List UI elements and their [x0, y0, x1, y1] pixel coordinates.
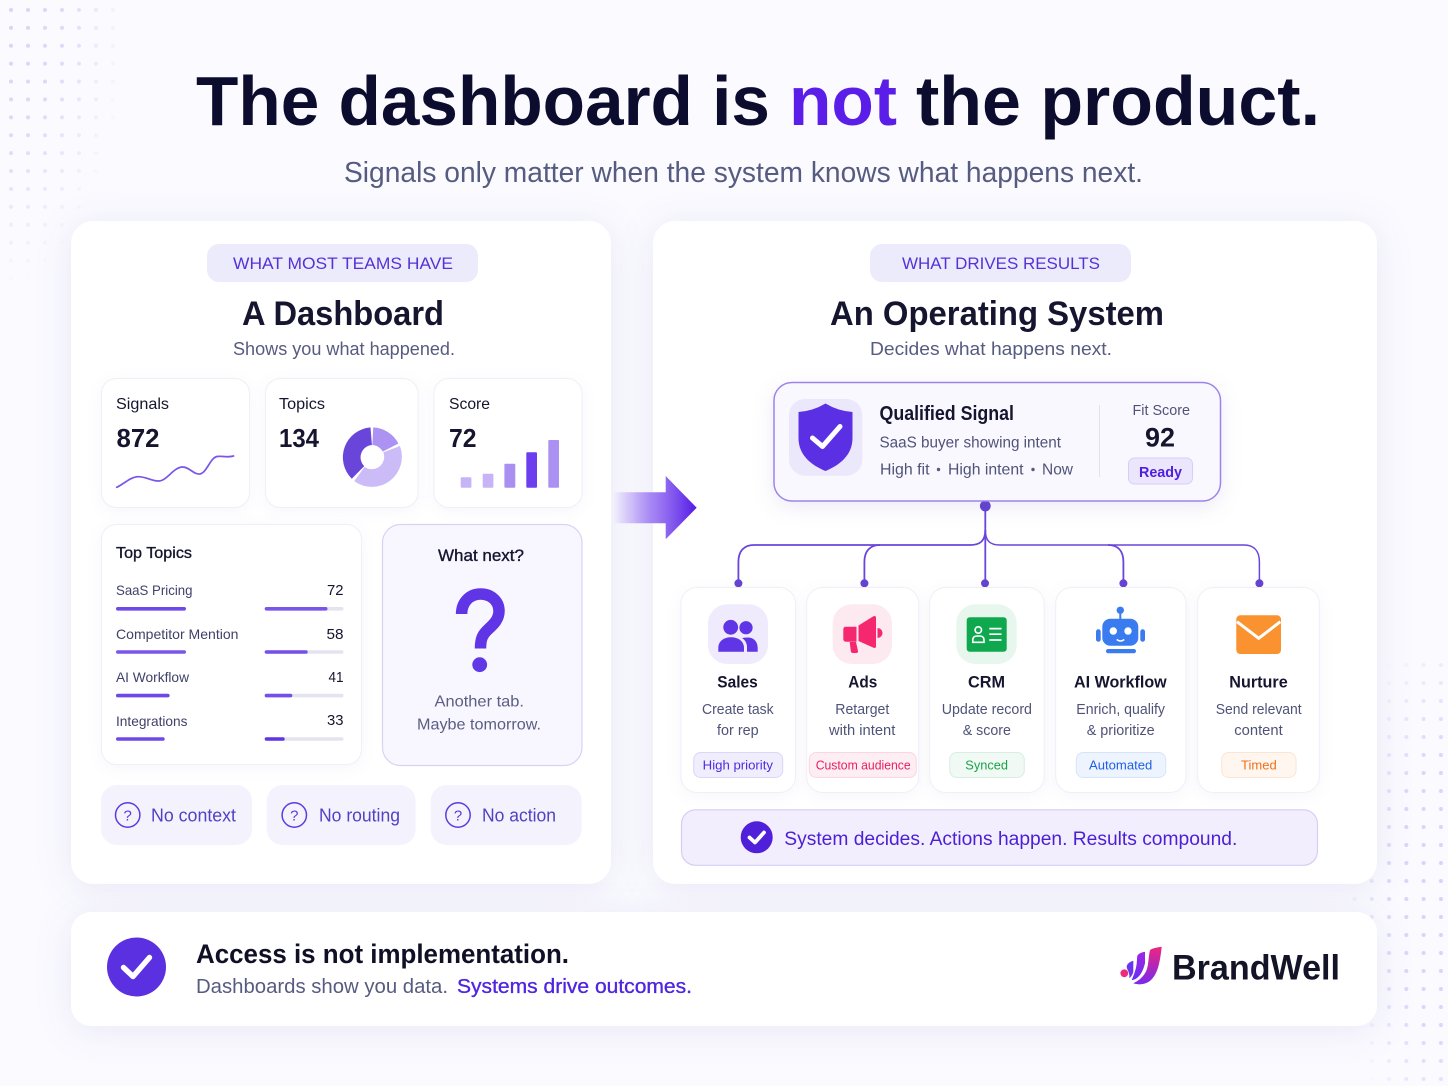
card: top topics [102, 524, 362, 764]
card: crm: & score [963, 723, 1011, 739]
card: score: Score [449, 396, 490, 413]
tag: high priority [694, 752, 783, 778]
chip: no routing: ? [290, 808, 298, 824]
icon: megaphone [833, 604, 892, 664]
arrow [613, 476, 697, 539]
card: qualified signal: High fit [880, 461, 930, 478]
card: ai workflow: Enrich, qualify [1076, 702, 1166, 718]
icon: check circle [107, 938, 166, 996]
card: topics [266, 378, 418, 508]
card: ai workflow: & prioritize [1087, 723, 1155, 739]
badge: what drives results [870, 244, 1131, 282]
footer headline: Access is not implementation. [196, 939, 569, 969]
tag: custom audience: Custom audience [816, 758, 911, 772]
fit score: Fit Score [1132, 403, 1190, 419]
badge: what most teams have: WHAT MOST TEAMS HAVE [233, 254, 453, 273]
panel: a dashboard [71, 221, 611, 884]
card: sales: for rep [717, 723, 759, 739]
tag: high priority: High priority [703, 758, 774, 772]
title [196, 62, 1320, 140]
fit score: Ready [1139, 464, 1183, 481]
card: qualified signal: High intent [948, 461, 1024, 478]
card: qualified signal: Qualified Signal [880, 403, 1014, 425]
heading: a dashboard: A Dashboard [242, 295, 444, 333]
chip: no routing [267, 785, 416, 845]
row: competitor mention: 58 [326, 626, 344, 643]
card: what next: Maybe tomorrow. [417, 717, 541, 734]
connector lines [734, 501, 1263, 587]
card: sales: Create task [702, 702, 774, 718]
fit score [1128, 403, 1192, 484]
fit score: 92 [1145, 423, 1175, 453]
card: topics: 134 [279, 423, 319, 453]
row: competitor mention [116, 626, 344, 654]
tag: timed: Timed [1241, 758, 1277, 772]
card: signals: 872 [116, 423, 160, 453]
card: qualified signal [774, 382, 1220, 501]
card: ai workflow: AI Workflow [1074, 673, 1167, 692]
subheading: shows you what happened: Shows you what happened. [233, 339, 455, 359]
banner: system decides [682, 810, 1318, 865]
card: nurture: content [1234, 723, 1283, 739]
card: score [434, 378, 582, 508]
sparkline [117, 456, 234, 487]
row: ai workflow [116, 669, 344, 697]
chip: no context: No context [151, 806, 236, 826]
row: integrations [116, 712, 344, 741]
card: nurture: Send relevant [1216, 702, 1302, 718]
panel: an operating system [653, 221, 1377, 884]
icon: shield check [789, 399, 862, 476]
banner: system decides: System decides. Actions happen. Results compound. [784, 829, 1237, 850]
heading: an operating system: An Operating System [830, 295, 1164, 333]
row: competitor mention: Competitor Mention [116, 626, 238, 642]
card: nurture: Nurture [1229, 673, 1288, 692]
row: saas pricing: 72 [327, 582, 344, 599]
card: crm: Update record [942, 702, 1032, 718]
card: ads: Ads [848, 673, 877, 692]
card: crm: CRM [968, 673, 1005, 692]
chip: no context: ? [124, 808, 132, 824]
donut chart [352, 436, 393, 478]
card: what next [382, 524, 582, 766]
tag: synced: Synced [965, 758, 1008, 772]
row: saas pricing [116, 582, 344, 611]
card: ads [807, 588, 919, 792]
footer text: Dashboards show you data. [196, 976, 448, 998]
icon: question mark [462, 594, 499, 672]
title: the product. [916, 62, 1320, 140]
footer panel [71, 912, 1377, 1026]
card: what next: What next? [438, 547, 524, 565]
chip: no context [101, 785, 252, 845]
footer text [196, 976, 692, 998]
row: saas pricing: SaaS Pricing [116, 582, 192, 598]
card: signals [102, 378, 250, 508]
row: ai workflow: 41 [328, 669, 344, 686]
card: sales: Sales [717, 673, 758, 692]
card: qualified signal: Now [1042, 461, 1073, 478]
card: nurture [1198, 588, 1319, 792]
card: score: 72 [449, 423, 476, 453]
card: top topics: Top Topics [116, 545, 192, 562]
tag: automated [1076, 752, 1166, 778]
card: sales [681, 588, 796, 792]
bar chart [461, 440, 559, 488]
card: crm [930, 588, 1044, 792]
chip: no action: No action [482, 806, 556, 826]
title: not [789, 62, 897, 140]
footer text: Systems drive outcomes. [457, 976, 692, 998]
subtitle: Signals only matter when the system knows what happens next. [344, 157, 1143, 189]
tag: timed [1222, 752, 1296, 778]
badge: what drives results: WHAT DRIVES RESULTS [902, 254, 1100, 273]
card: ads: with intent [828, 723, 895, 739]
tag: custom audience [809, 752, 916, 778]
logo: brandwell: BrandWell [1172, 948, 1340, 987]
row: ai workflow: AI Workflow [116, 669, 190, 685]
card: topics: Topics [279, 396, 325, 413]
tag: synced [950, 752, 1024, 778]
row: integrations: 33 [327, 712, 344, 729]
tag: automated: Automated [1089, 758, 1152, 772]
card: ai workflow [1056, 588, 1186, 792]
row: integrations: Integrations [116, 713, 188, 729]
card: what next: Another tab. [434, 694, 524, 711]
card: signals: Signals [116, 396, 169, 413]
card: qualified signal: SaaS buyer showing intent [880, 434, 1062, 451]
chip: no action [431, 785, 582, 845]
badge: what most teams have [207, 244, 478, 282]
icon: people [708, 604, 768, 664]
icon: robot [1096, 607, 1145, 653]
icon: envelope [1236, 615, 1281, 654]
card: ads: Retarget [835, 702, 889, 718]
title: The dashboard is [196, 62, 770, 140]
subheading: decides what happens next: Decides what happens next. [870, 339, 1112, 359]
chip: no action: ? [454, 808, 462, 824]
chip: no routing: No routing [319, 806, 400, 826]
icon: contact card [956, 604, 1017, 664]
